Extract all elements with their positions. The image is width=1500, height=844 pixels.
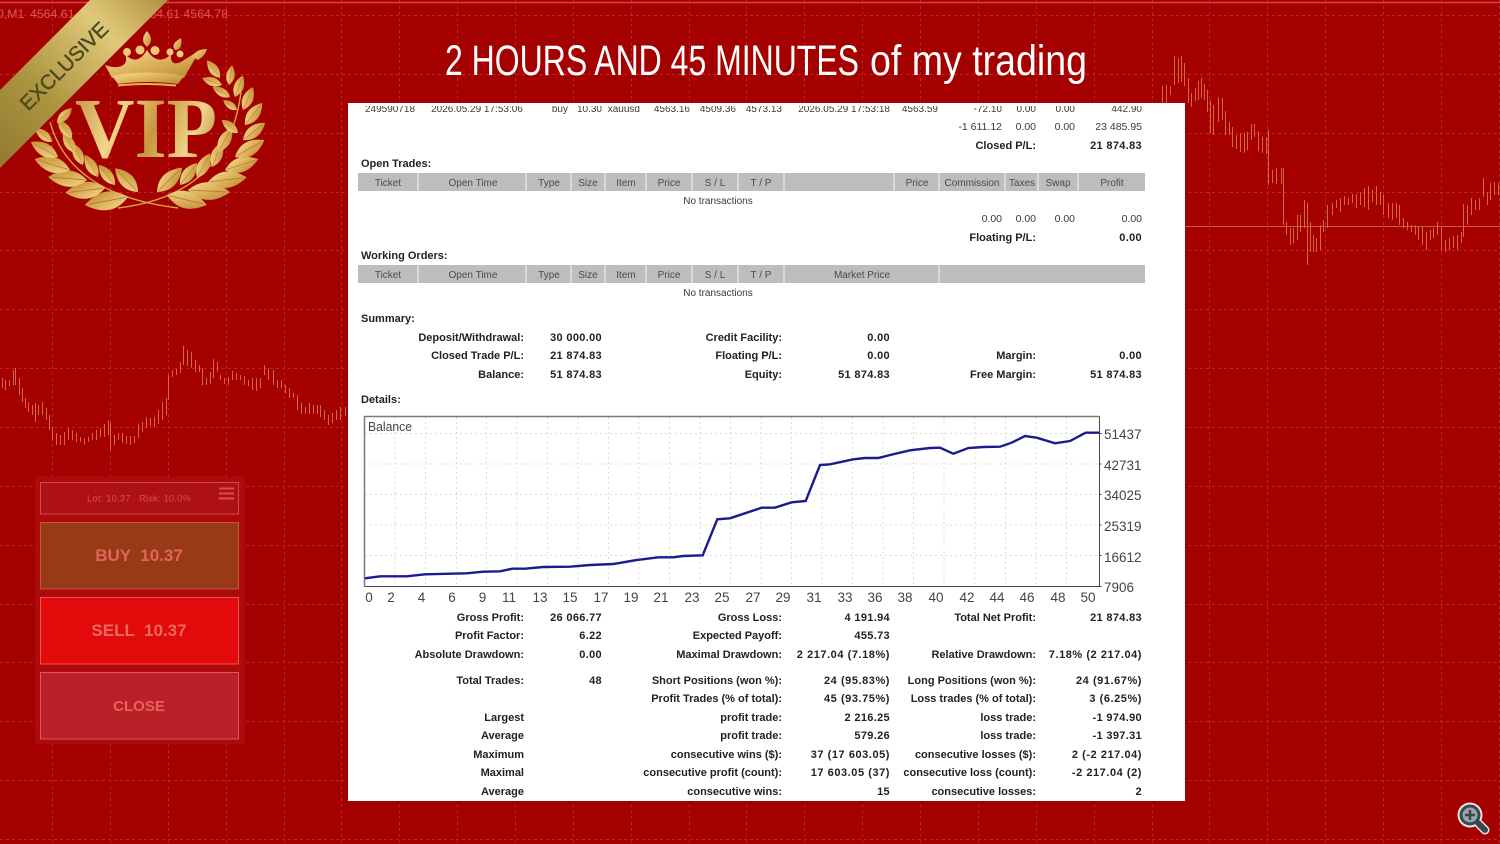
x axis labels: 15	[562, 590, 578, 605]
statistics table: Absolute Drawdown:	[415, 649, 524, 661]
statistics table: consecutive losses:	[931, 786, 1036, 798]
close button: CLOSE	[113, 698, 165, 715]
working orders section: T / P	[751, 270, 772, 281]
summary section: Equity:	[745, 369, 782, 381]
closed trades rows: 2026.05.29 17:53:06	[431, 104, 523, 115]
statistics table: Maximal	[481, 767, 524, 779]
closed trades rows: 0.00	[1055, 121, 1075, 133]
y axis labels: 51437	[1104, 427, 1142, 442]
closed trades rows: 0.00	[1017, 104, 1036, 115]
statistics table: consecutive wins:	[687, 786, 782, 798]
closed trades rows: 10.30	[577, 104, 602, 115]
title: of my trading	[870, 37, 1087, 85]
y axis labels: 7906	[1104, 580, 1134, 595]
closed trades rows: 4573.13	[746, 104, 782, 115]
x axis labels: 27	[745, 590, 761, 605]
open trades section: Profit	[1100, 178, 1124, 189]
statistics table: Loss trades (% of total):	[911, 693, 1036, 705]
statistics table: 17 603.05 (37)	[811, 767, 890, 779]
closed trades rows: 4509.36	[700, 104, 736, 115]
working orders section: Type	[538, 270, 560, 281]
x axis labels: 42	[959, 590, 975, 605]
panel: account report	[348, 103, 1185, 801]
y axis labels	[1104, 427, 1142, 595]
x axis labels: 44	[989, 590, 1005, 605]
statistics table: profit trade:	[720, 730, 782, 742]
statistics table: 2	[1136, 786, 1142, 798]
statistics table: loss trade:	[980, 712, 1036, 724]
statistics table: 48	[589, 675, 602, 687]
x axis labels: 0	[365, 590, 373, 605]
working orders section: Ticket	[375, 270, 401, 281]
statistics table: Relative Drawdown:	[931, 649, 1036, 661]
balance line chart	[364, 416, 1142, 605]
close button	[40, 672, 238, 739]
y axis labels: 42731	[1104, 458, 1142, 473]
summary section: Floating P/L:	[715, 350, 782, 362]
open trades section: Price	[906, 178, 929, 189]
y axis labels: 16612	[1104, 550, 1142, 565]
statistics table: profit trade:	[720, 712, 782, 724]
x axis labels: 36	[867, 590, 883, 605]
closed trades rows: 0.00	[1016, 121, 1036, 133]
summary section: 30 000.00	[550, 332, 602, 344]
statistics table: Total Trades:	[456, 675, 524, 687]
summary section: Balance:	[478, 369, 524, 381]
closed trades rows: Closed P/L:	[975, 140, 1036, 152]
summary section: 51 874.83	[550, 369, 602, 381]
working orders section: Open Time	[449, 270, 498, 281]
title: 2 HOURS AND 45 MINUTES	[445, 37, 859, 85]
open trades section: Floating P/L:	[969, 232, 1036, 244]
price chart left	[2, 346, 346, 450]
statistics table: 7.18% (2 217.04)	[1049, 649, 1142, 661]
details heading: Details:	[361, 394, 401, 406]
statistics table: Short Positions (won %):	[652, 675, 782, 687]
statistics table	[415, 612, 1142, 798]
summary section	[361, 313, 1142, 381]
buy button: BUY 10.37	[95, 546, 183, 565]
summary section: Closed Trade P/L:	[431, 350, 524, 362]
closed trades rows: 0.00	[1056, 104, 1075, 115]
x axis labels: 48	[1050, 590, 1066, 605]
open trades section: Open Trades:	[361, 158, 431, 170]
statistics table: Gross Loss:	[718, 612, 782, 624]
statistics table: 24 (91.67%)	[1076, 675, 1142, 687]
summary section: Free Margin:	[970, 369, 1036, 381]
statistics table: -2 217.04 (2)	[1072, 767, 1142, 779]
exclusive ribbon	[0, 0, 168, 168]
open trades section: Price	[658, 178, 681, 189]
closed trades rows: 442.90	[1111, 104, 1142, 115]
summary section: 0.00	[867, 332, 890, 344]
sell button: SELL 10.37	[91, 621, 187, 640]
statistics table: consecutive losses ($):	[915, 749, 1036, 761]
working orders section: Item	[616, 270, 636, 281]
statistics table: Gross Profit:	[457, 612, 524, 624]
summary section: 51 874.83	[1090, 369, 1142, 381]
x axis labels: 29	[775, 590, 791, 605]
y axis labels: 25319	[1104, 519, 1142, 534]
x axis labels: 19	[623, 590, 639, 605]
x axis labels: 11	[502, 590, 516, 605]
closed trades rows: 2026.05.29 17:53:18	[798, 104, 890, 115]
working orders section: No transactions	[683, 288, 753, 299]
statistics table: 2 216.25	[845, 712, 890, 724]
statistics table: Expected Payoff:	[693, 630, 782, 642]
statistics table: 3 (6.25%)	[1089, 693, 1142, 705]
statistics table: Average	[481, 730, 524, 742]
open trades section: Commission	[944, 178, 1000, 189]
statistics table: consecutive profit (count):	[643, 767, 782, 779]
open trades section: Swap	[1045, 178, 1071, 189]
summary section: Deposit/Withdrawal:	[418, 332, 524, 344]
x axis labels: 9	[479, 590, 486, 605]
icon: zoom magnifier	[1458, 802, 1485, 830]
statistics table: consecutive loss (count):	[903, 767, 1036, 779]
statistics table: 21 874.83	[1090, 612, 1142, 624]
summary section: 21 874.83	[550, 350, 602, 362]
open trades section: Item	[616, 178, 636, 189]
x axis labels: 13	[532, 590, 548, 605]
statistics table: 26 066.77	[550, 612, 602, 624]
open trades section: T / P	[751, 178, 772, 189]
open trades section: 0.00	[1122, 213, 1142, 225]
statistics table: 15	[877, 786, 890, 798]
statistics table: Long Positions (won %):	[908, 675, 1036, 687]
open trades section: Taxes	[1009, 178, 1035, 189]
open trades section: Open Time	[449, 178, 498, 189]
crown	[105, 31, 207, 86]
statistics table: 37 (17 603.05)	[811, 749, 890, 761]
summary section: 0.00	[1119, 350, 1142, 362]
statistics table: Total Net Profit:	[954, 612, 1036, 624]
working orders section: S / L	[705, 270, 726, 281]
statistics table: loss trade:	[980, 730, 1036, 742]
x axis labels: 50	[1080, 590, 1096, 605]
chart symbol and price readout	[0, 7, 228, 21]
closed trades rows: 249590718	[365, 104, 415, 115]
summary section: Summary:	[361, 313, 415, 325]
VIP lettering: VIP	[75, 80, 217, 176]
statistics table: -1 974.90	[1093, 712, 1142, 724]
x axis labels: 38	[897, 590, 913, 605]
summary section: Credit Facility:	[706, 332, 782, 344]
closed trades rows: 21 874.83	[1090, 140, 1142, 152]
lot and risk header: Lot: 10.37 Risk: 10.0%	[87, 494, 192, 504]
statistics table: 0.00	[579, 649, 602, 661]
balance curve	[365, 433, 1099, 578]
statistics table: Maximal Drawdown:	[676, 649, 782, 661]
x axis labels: 46	[1019, 590, 1035, 605]
closed trades rows	[348, 103, 1185, 152]
working orders section: Size	[578, 270, 598, 281]
statistics table: Average	[481, 786, 524, 798]
statistics table: 2 (-2 217.04)	[1072, 749, 1142, 761]
statistics table: Maximum	[473, 749, 524, 761]
summary section: 51 874.83	[838, 369, 890, 381]
x axis labels: 23	[684, 590, 700, 605]
x axis labels: 21	[653, 590, 669, 605]
open trades section: S / L	[705, 178, 726, 189]
x axis labels: 4	[418, 590, 426, 605]
y axis labels: 34025	[1104, 488, 1142, 503]
statistics table: 455.73	[854, 630, 890, 642]
statistics table: 24 (95.83%)	[824, 675, 890, 687]
working orders section	[358, 250, 1145, 299]
statistics table: 6.22	[579, 630, 602, 642]
x axis labels: 2	[387, 590, 395, 605]
working orders section: Price	[658, 270, 681, 281]
price chart right	[1162, 56, 1498, 265]
open trades section: Type	[538, 178, 560, 189]
summary section: Margin:	[996, 350, 1036, 362]
closed trades rows: 4563.59	[902, 104, 938, 115]
x axis labels: 17	[593, 590, 609, 605]
chart symbol and price readout: 4564.61 4564.78	[136, 7, 228, 21]
working orders section: Market Price	[834, 270, 890, 281]
x axis labels: 31	[806, 590, 822, 605]
open trades section: 0.00	[1016, 213, 1036, 225]
statistics table: 579.26	[854, 730, 890, 742]
buy button	[40, 522, 238, 589]
x axis labels	[365, 590, 1096, 605]
open trades section	[358, 158, 1145, 244]
statistics table: 2 217.04 (7.18%)	[797, 649, 890, 661]
closed trades rows: -1 611.12	[958, 121, 1002, 133]
closed trades rows: -72.10	[974, 104, 1002, 115]
statistics table: Profit Trades (% of total):	[651, 693, 782, 705]
x axis labels: 40	[928, 590, 944, 605]
open trades section: 0.00	[1055, 213, 1075, 225]
lot and risk header	[40, 482, 238, 514]
statistics table: consecutive wins ($):	[671, 749, 782, 761]
open trades section: No transactions	[683, 196, 753, 207]
statistics table: Profit Factor:	[455, 630, 524, 642]
x axis labels: 33	[837, 590, 853, 605]
open trades section: 0.00	[982, 213, 1002, 225]
statistics table: 45 (93.75%)	[824, 693, 890, 705]
closed trades rows: buy	[552, 104, 568, 115]
x axis labels: 6	[448, 590, 456, 605]
ribbon label: EXCLUSIVE	[16, 18, 113, 115]
working orders section: Working Orders:	[361, 250, 448, 262]
open trades section: Ticket	[375, 178, 401, 189]
closed trades rows: 4563.16	[654, 104, 690, 115]
statistics table: 4 191.94	[845, 612, 891, 624]
sell button	[40, 598, 238, 664]
chart legend: Balance	[368, 419, 412, 434]
summary section: 0.00	[867, 350, 890, 362]
statistics table: Largest	[484, 712, 524, 724]
open trades section: 0.00	[1119, 232, 1142, 244]
VIP wreath logo	[28, 57, 269, 214]
closed trades rows: 23 485.95	[1095, 121, 1142, 133]
panel: trade buttons	[35, 476, 245, 744]
open trades section: Size	[578, 178, 598, 189]
closed trades rows: xauusd	[608, 104, 640, 115]
x axis labels: 25	[714, 590, 730, 605]
chart symbol and price readout: 4564.61	[30, 7, 75, 21]
statistics table: -1 397.31	[1093, 730, 1142, 742]
